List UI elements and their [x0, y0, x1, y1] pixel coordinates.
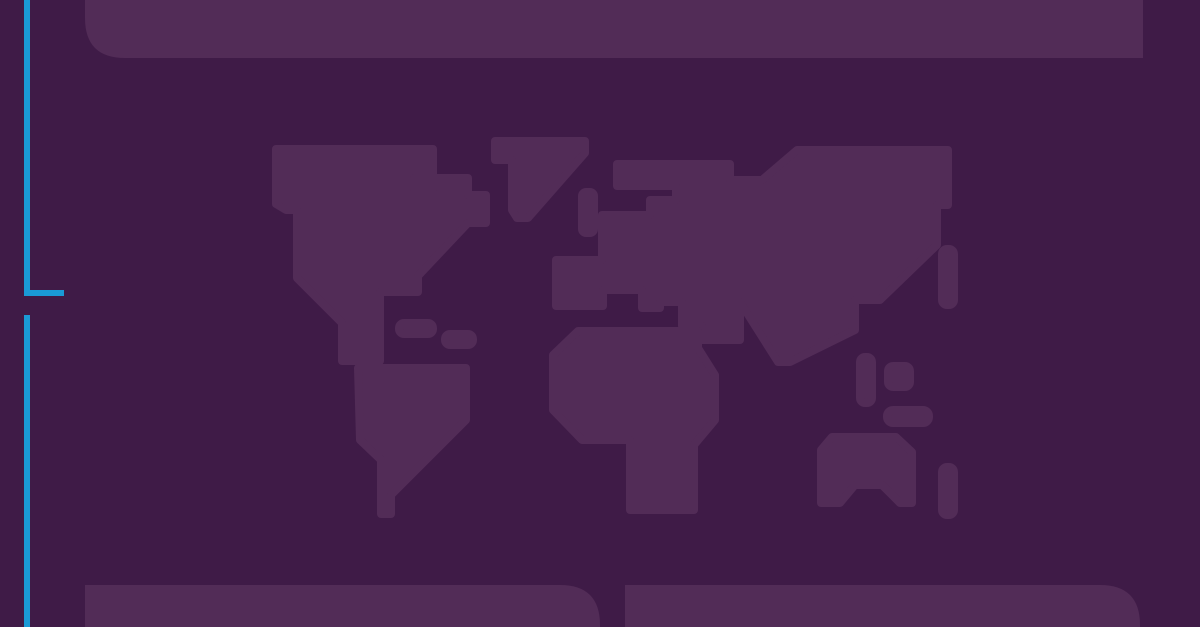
map: north america: [276, 149, 486, 361]
panel: bottom right: [625, 585, 1140, 627]
map: greenland: [495, 141, 585, 218]
panel: top banner: [85, 0, 1143, 58]
panel: bottom left: [85, 585, 600, 627]
map: africa: [553, 331, 715, 510]
accent line: blue bracket: [24, 0, 64, 627]
map: islands east: [942, 249, 954, 305]
map: australia: [821, 437, 912, 503]
map: small island: [582, 192, 594, 233]
map: eurasia: [556, 150, 948, 362]
world map: [276, 141, 954, 515]
map: caribbean: [399, 323, 433, 334]
map: south america: [358, 368, 466, 514]
